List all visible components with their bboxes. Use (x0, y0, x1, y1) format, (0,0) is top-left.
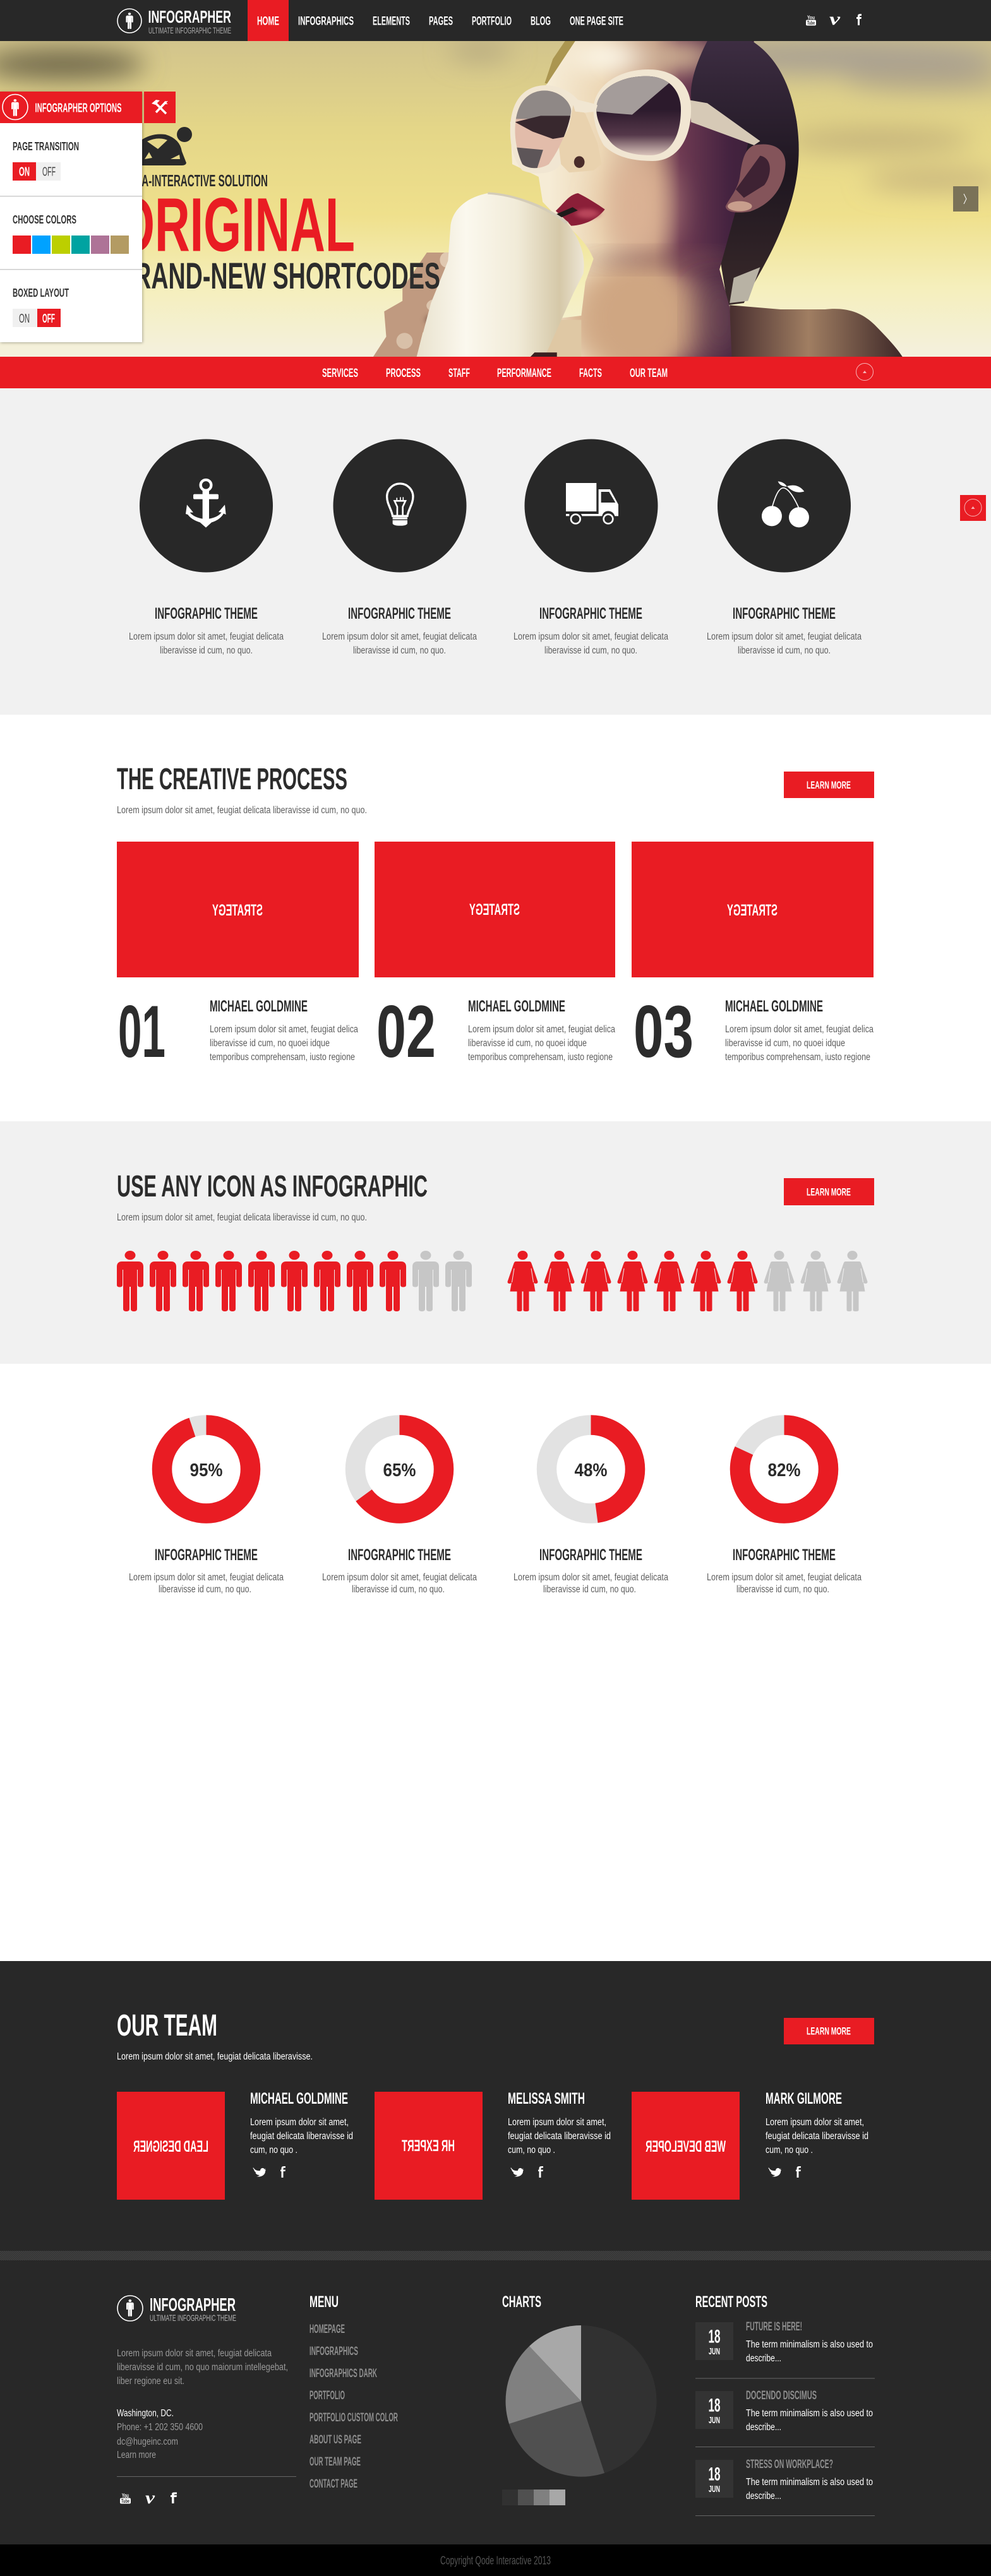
post 2: JUN (709, 2415, 720, 2426)
service text 3: Lorem ipsum dolor sit amet, feugiat delicata (514, 631, 668, 642)
charts heading: CHARTS (502, 2293, 541, 2311)
service text 2 (322, 605, 477, 656)
footer contact details: dc@hugeinc.com (117, 2436, 178, 2447)
service text 2: Lorem ipsum dolor sit amet, feugiat delicata (322, 631, 477, 642)
footer logo: INFOGRAPHER (150, 2295, 236, 2315)
hero title ORIGINAL: ORIGINAL (117, 182, 355, 268)
header social icons: v (829, 9, 841, 28)
donut text 2 (322, 1546, 477, 1595)
header social icons: Tube (807, 20, 815, 26)
intro text: Lorem ipsum dolor sit amet, feugiat delicata liberavisse id cum, no quo. (117, 1212, 367, 1223)
service text 1: INFOGRAPHIC THEME (155, 605, 258, 623)
icon: truck (566, 483, 618, 523)
panel: our team (0, 1961, 991, 2251)
donut 95% (162, 1425, 250, 1513)
main navigation: INFOGRAPHICS (298, 14, 354, 28)
step 02 (376, 990, 615, 1073)
service text 4: Lorem ipsum dolor sit amet, feugiat delicata (707, 631, 862, 642)
footer contact details (117, 2408, 203, 2460)
section links: PERFORMANCE (497, 366, 551, 380)
service text 4 (707, 605, 862, 656)
footer menu links: ABOUT US PAGE (309, 2433, 361, 2447)
member bio: Mark Gilmore: cum, no quo . (766, 2145, 813, 2156)
icon: anchor (186, 480, 226, 528)
heading: USE ANY ICON AS INFOGRAPHIC (117, 1170, 428, 1203)
member tile: lead designer (117, 2092, 225, 2200)
step 02: temporibus comprehensam, iusto regione (468, 1052, 613, 1063)
percentage values: 82% (768, 1460, 801, 1481)
heading: OUR TEAM (117, 2009, 217, 2042)
tools button (144, 92, 176, 123)
colour swatches (13, 236, 129, 254)
member bio: Mark Gilmore: feugiat delicata liberavisse id (766, 2131, 868, 2142)
panel: donut charts (129, 1425, 862, 1595)
post 1 (695, 2320, 875, 2379)
intro text: Lorem ipsum dolor sit amet, feugiat delicata liberavisse. (117, 2051, 313, 2062)
post 2 (695, 2389, 875, 2447)
ear (726, 145, 786, 213)
service text 3: INFOGRAPHIC THEME (539, 605, 642, 623)
pie legend (502, 2490, 565, 2505)
step 02: Lorem ipsum dolor sit amet, feugiat delica (468, 1024, 615, 1035)
skin shading (544, 40, 740, 373)
pictogram row: men (117, 1251, 472, 1311)
step 01: Lorem ipsum dolor sit amet, feugiat delica (210, 1024, 358, 1035)
member tile: web developer (632, 2092, 740, 2200)
slider next arrow (953, 186, 978, 212)
strategy tile 1 (117, 842, 359, 977)
step 01: temporibus comprehensam, iusto regione (210, 1052, 355, 1063)
copyright bar (0, 2544, 991, 2576)
learn more button (784, 772, 874, 798)
footer menu links: PORTFOLIO CUSTOM COLOR (309, 2411, 398, 2424)
panel: icon infographic (0, 1121, 991, 1364)
donut text 3: Lorem ipsum dolor sit amet, feugiat delicata (514, 1572, 668, 1583)
section links: SERVICES (322, 366, 358, 380)
post 3: STRESS ON WORKPLACE? (746, 2458, 833, 2471)
scroll up icon (856, 364, 873, 380)
donut text 3: INFOGRAPHIC THEME (539, 1546, 642, 1564)
service circle 2 (333, 439, 466, 572)
donut text 2: liberavisse id cum, no quo. (352, 1584, 445, 1595)
step 01: 01 (118, 990, 165, 1073)
sunglasses left frame (510, 85, 582, 174)
donut text 1 (129, 1546, 284, 1595)
member bio: Michael Goldmine (250, 2090, 353, 2178)
step 01 (118, 990, 358, 1073)
hero eyebrow text: ULTRA-INTERACTIVE SOLUTION (117, 171, 268, 190)
pictogram row: women (508, 1251, 868, 1311)
post 3: The term minimalism is also used to (746, 2477, 873, 2488)
sky clouds (0, 39, 991, 190)
post 1: describe... (746, 2353, 781, 2364)
member bio: Melissa Smith: feugiat delicata liberavisse id (508, 2131, 611, 2142)
intro text: Lorem ipsum dolor sit amet, feugiat delicata liberavisse id cum, no quo. (117, 805, 367, 816)
footer social icons: You (122, 2493, 129, 2500)
options logo (3, 95, 28, 120)
strategy tile 3: STRATEGY (727, 902, 778, 919)
main navigation: PAGES (429, 14, 453, 28)
service text 4: liberavisse id cum, no quo. (738, 645, 831, 656)
member bio: Melissa Smith: MELISSA SMITH (508, 2090, 585, 2108)
boxed layout toggle (13, 309, 61, 327)
face and neck (510, 41, 754, 357)
donut text 4: liberavisse id cum, no quo. (736, 1584, 829, 1595)
member tile: lead designer: LEAD DESIGNER (133, 2138, 208, 2156)
donut text 2: Lorem ipsum dolor sit amet, feugiat delicata (322, 1572, 477, 1583)
page transition toggle: ON (19, 165, 30, 179)
footer contact details: Washington, DC. (117, 2408, 174, 2419)
hand (373, 253, 455, 357)
shoulder (730, 305, 903, 357)
member tile: hr expert: HR EXPERT (402, 2137, 455, 2155)
footer menu links: CONTACT PAGE (309, 2478, 357, 2491)
member bio: Michael Goldmine: Lorem ipsum dolor sit amet, (250, 2117, 349, 2128)
footer about text (117, 2348, 288, 2387)
learn more button (784, 2018, 874, 2044)
footer logo (117, 2295, 236, 2323)
step 03: 03 (634, 990, 694, 1073)
post 3 (695, 2458, 875, 2516)
step 01: liberavisse id cum, no quoei idque (210, 1038, 330, 1049)
logo tagline: ULTIMATE INFOGRAPHIC THEME (148, 25, 231, 35)
post 2: DOCENDO DISCIMUS (746, 2389, 817, 2402)
footer contact details: Learn more (117, 2450, 156, 2460)
post 2: The term minimalism is also used to (746, 2408, 873, 2419)
member bio: Michael Goldmine: MICHAEL GOLDMINE (250, 2090, 348, 2108)
footer about text: liber regione eu sit. (117, 2376, 184, 2387)
options title: INFOGRAPHER OPTIONS (35, 101, 121, 115)
options header (0, 92, 142, 123)
service text 1: liberavisse id cum, no quo. (160, 645, 253, 656)
step 02: MICHAEL GOLDMINE (468, 998, 565, 1015)
copyright bar: Copyright Qode Interactive 2013 (440, 2555, 551, 2567)
strategy tile 1: STRATEGY (212, 902, 263, 919)
percentage values: 65% (383, 1460, 416, 1481)
header social icons (806, 9, 862, 28)
member bio: Melissa Smith (508, 2090, 611, 2178)
member bio: Melissa Smith: cum, no quo . (508, 2145, 555, 2156)
main navigation: ONE PAGE SITE (570, 14, 623, 28)
footer menu links: HOMEPAGE (309, 2323, 345, 2336)
step 03: MICHAEL GOLDMINE (725, 998, 823, 1015)
hero slider (0, 39, 991, 373)
step 03: liberavisse id cum, no quoei idque (725, 1038, 845, 1049)
main navigation: ELEMENTS (373, 14, 410, 28)
page transition toggle: OFF (42, 165, 56, 179)
footer logo: ULTIMATE INFOGRAPHIC THEME (150, 2313, 236, 2323)
post 1: FUTURE IS HERE! (746, 2320, 802, 2334)
service text 1: Lorem ipsum dolor sit amet, feugiat delicata (129, 631, 284, 642)
boxed layout toggle: OFF (42, 312, 55, 326)
percentage values: 95% (189, 1460, 223, 1481)
section links: STAFF (448, 366, 470, 380)
post 3: JUN (709, 2484, 720, 2495)
strategy tile 3 (632, 842, 874, 977)
member tile: web developer: WEB DEVELOPER (646, 2138, 726, 2156)
main navigation: PORTFOLIO (472, 14, 512, 28)
post 1: The term minimalism is also used to (746, 2339, 873, 2350)
donut 82% (740, 1425, 829, 1513)
section links: OUR TEAM (630, 366, 668, 380)
donut text 1: INFOGRAPHIC THEME (155, 1546, 258, 1564)
section links: FACTS (579, 366, 602, 380)
section links (322, 366, 668, 380)
service text 4: INFOGRAPHIC THEME (733, 605, 836, 623)
footer contact details: Phone: +1 202 350 4600 (117, 2422, 203, 2433)
donut text 4: Lorem ipsum dolor sit amet, feugiat delicata (707, 1572, 862, 1583)
blonde hair strand (544, 41, 575, 83)
member bio: Michael Goldmine: feugiat delicata liberavisse id (250, 2131, 353, 2142)
donut 65% (355, 1425, 443, 1513)
post 2: describe... (746, 2422, 781, 2433)
lips (556, 193, 605, 226)
service circle 3 (524, 439, 658, 572)
post 1: 18 (709, 2326, 720, 2347)
section links: PROCESS (386, 366, 421, 380)
footer social icons (120, 2488, 177, 2507)
learn more button (784, 1178, 874, 1205)
footer menu links: PORTFOLIO (309, 2389, 345, 2402)
percentage values: 48% (575, 1460, 608, 1481)
member bio: Mark Gilmore: Lorem ipsum dolor sit amet, (766, 2117, 864, 2128)
donut text 2: INFOGRAPHIC THEME (348, 1546, 451, 1564)
icon: cherries (762, 481, 809, 527)
strategy tile 2 (375, 842, 615, 977)
main navigation: BLOG (531, 14, 551, 28)
learn more button: LEARN MORE (807, 1187, 851, 1198)
sunglasses right lens (596, 76, 681, 155)
logo text: INFOGRAPHER (148, 7, 231, 27)
footer about text: liberavisse id cum, no quo maiorum intellegebat, (117, 2362, 288, 2373)
strategy tile 2: STRATEGY (469, 901, 520, 919)
step 02: liberavisse id cum, no quoei idque (468, 1038, 587, 1049)
service circle 4 (718, 439, 851, 572)
member tile: hr expert (375, 2092, 483, 2200)
learn more button: LEARN MORE (807, 2025, 851, 2037)
service circle 1 (140, 439, 273, 572)
footer menu links: INFOGRAPHICS DARK (309, 2367, 377, 2380)
donut text 4: INFOGRAPHIC THEME (733, 1546, 836, 1564)
footer social icons: v (145, 2488, 155, 2507)
boxed layout label: BOXED LAYOUT (13, 287, 69, 299)
panel: infographer options (0, 92, 176, 342)
nose (559, 105, 602, 172)
panel: creative process (117, 763, 874, 1073)
member bio: Melissa Smith: Lorem ipsum dolor sit amet, (508, 2117, 606, 2128)
step 02: 02 (376, 990, 436, 1073)
percentage values (189, 1460, 801, 1481)
heading: THE CREATIVE PROCESS (117, 763, 347, 796)
sunglasses temple arm (689, 100, 760, 145)
donut text 3: liberavisse id cum, no quo. (543, 1584, 636, 1595)
recent posts heading: RECENT POSTS (695, 2293, 767, 2311)
service text 1 (129, 605, 284, 656)
footer menu links: INFOGRAPHICS (309, 2345, 358, 2358)
dark hair (721, 42, 799, 305)
post 3: 18 (709, 2464, 720, 2485)
service text 3 (514, 605, 668, 656)
hero subtitle: BRAND-NEW SHORTCODES (117, 256, 440, 297)
hair over forehead (691, 41, 799, 145)
panel: footer (0, 2260, 991, 2544)
header social icons: You (807, 14, 815, 20)
service text 3: liberavisse id cum, no quo. (544, 645, 637, 656)
page transition toggle (13, 162, 61, 181)
donut text 1: liberavisse id cum, no quo. (159, 1584, 251, 1595)
member bio: Mark Gilmore (766, 2090, 868, 2178)
pie chart (506, 2325, 657, 2477)
hero crouching person icon (140, 127, 192, 165)
service text 2: liberavisse id cum, no quo. (353, 645, 446, 656)
footer menu heading: MENU (309, 2293, 339, 2311)
main navigation (257, 14, 623, 28)
donut text 3 (514, 1546, 668, 1595)
footer menu links: OUR TEAM PAGE (309, 2455, 361, 2469)
footer about text: Lorem ipsum dolor sit amet, feugiat delicata (117, 2348, 272, 2359)
post 3: describe... (746, 2491, 781, 2501)
choose colors label: CHOOSE COLORS (13, 213, 76, 226)
secondary red navigation bar (0, 357, 991, 388)
donut text 1: Lorem ipsum dolor sit amet, feugiat delicata (129, 1572, 284, 1583)
step 03: temporibus comprehensam, iusto regione (725, 1052, 870, 1063)
post 2: 18 (709, 2395, 720, 2416)
service text 2: INFOGRAPHIC THEME (348, 605, 451, 623)
pale hair ends (730, 267, 760, 303)
step 03: Lorem ipsum dolor sit amet, feugiat delica (725, 1024, 874, 1035)
woman with sunglasses and cup (373, 40, 903, 373)
post 1: JUN (709, 2346, 720, 2357)
page transition label: PAGE TRANSITION (13, 140, 79, 153)
main navigation: HOME (257, 14, 279, 28)
sunglasses right frame (594, 69, 691, 161)
member bio: Mark Gilmore: MARK GILMORE (766, 2090, 842, 2108)
donut 48% (547, 1425, 635, 1513)
footer social icons: Tube (121, 2498, 129, 2504)
active nav item (248, 0, 289, 41)
donut text 4 (707, 1546, 862, 1595)
boxed layout toggle: ON (19, 312, 30, 326)
side scroll button (960, 495, 986, 521)
step 01: MICHAEL GOLDMINE (210, 998, 308, 1015)
top header bar (0, 0, 991, 41)
step 03 (634, 990, 874, 1073)
panel: services (0, 388, 991, 715)
footer menu links (309, 2323, 398, 2491)
logo icon (117, 9, 141, 33)
learn more button: LEARN MORE (807, 780, 851, 791)
member bio: Michael Goldmine: cum, no quo . (250, 2145, 297, 2156)
white cup (417, 193, 584, 357)
sunglasses left lens (515, 90, 571, 168)
icon: light bulb (387, 484, 413, 526)
